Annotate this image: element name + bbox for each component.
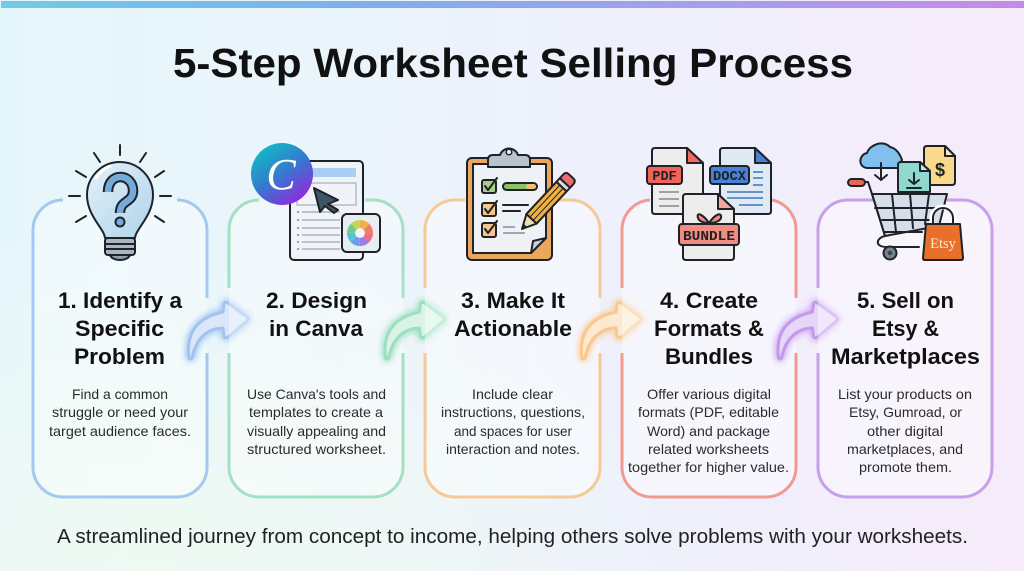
icon: shopping cart with downloads and Etsy bag (848, 143, 963, 260)
heading: step 4: Bundles (665, 344, 753, 369)
description: step 2: visually appealing and (247, 423, 386, 439)
description: step 5: promote them. (859, 459, 952, 475)
description: step 5: other digital (867, 423, 943, 439)
description: step 5: Etsy, Gumroad, or (849, 404, 962, 420)
heading: step 5: Etsy & (872, 316, 939, 341)
arrow: step 3 to 4 (581, 302, 641, 359)
description: step 5 (838, 386, 972, 475)
heading: step 1: Specific (75, 316, 164, 341)
icon: PDF, DOCX and bundle files: BUNDLE (683, 230, 735, 245)
description: step 4: Offer various digital (647, 386, 771, 402)
icon: Canva worksheet design (251, 143, 380, 260)
panel: step 3 (425, 149, 600, 497)
heading: step 3: 3. Make It (461, 288, 566, 313)
heading: step 5: 5. Sell on (857, 288, 954, 313)
top gradient bar (1, 1, 1024, 8)
heading: step 2: 2. Design (266, 288, 367, 313)
heading: step 2 (266, 288, 367, 341)
heading: step 1: 1. Identify a (58, 288, 182, 313)
heading: step 5 (831, 288, 980, 369)
description: step 5: marketplaces, and (847, 441, 963, 457)
description: step 1: Find a common (72, 386, 168, 402)
icon: PDF, DOCX and bundle files: DOCX (713, 170, 747, 185)
icon: PDF, DOCX and bundle files: PDF (652, 170, 677, 185)
description: step 1: struggle or need your (52, 404, 188, 420)
description: step 3 (441, 386, 585, 457)
panel: step 1 (33, 145, 207, 497)
description: step 2: structured worksheet. (247, 441, 386, 457)
description: step 4: formats (PDF, editable (638, 404, 779, 420)
panel: step 5 (818, 143, 992, 497)
description: step 4: Word) and package (647, 423, 770, 439)
description: step 3: instructions, questions, (441, 404, 585, 420)
panel: step 2 (229, 143, 403, 497)
title: 5-Step Worksheet Selling Process (173, 40, 853, 86)
heading: step 2: in Canva (269, 316, 363, 341)
arrow: step 2 to 3 (385, 302, 444, 359)
icon: light bulb with question mark (69, 145, 171, 260)
arrow: step 1 to 2 (188, 302, 248, 359)
heading: step 1 (58, 288, 182, 369)
description: step 2: Use Canva's tools and (247, 386, 386, 402)
heading: step 4 (654, 288, 764, 369)
description: step 4: together for higher value. (628, 459, 789, 475)
description: step 1 (49, 386, 191, 439)
icon: shopping cart with downloads and Etsy bag: $ (935, 160, 945, 180)
description: step 4: related worksheets (648, 441, 769, 457)
icon: shopping cart with downloads and Etsy bag: Etsy (930, 236, 957, 252)
icon: Canva worksheet design: C (266, 150, 296, 199)
icon: PDF, DOCX and bundle files (647, 148, 771, 260)
heading: step 4: Formats & (654, 316, 764, 341)
description: step 3: interaction and notes. (446, 441, 580, 457)
heading: step 3 (454, 288, 572, 341)
icon: clipboard checklist and pencil (467, 149, 576, 260)
description: step 3: Include clear (472, 386, 553, 402)
heading: step 4: 4. Create (660, 288, 758, 313)
arrow: step 4 to 5 (778, 302, 838, 359)
description: step 5: List your products on (838, 386, 972, 402)
description: step 1: target audience faces. (49, 423, 191, 439)
panel: step 4 (622, 148, 796, 497)
description: step 2 (247, 386, 386, 457)
heading: step 3: Actionable (454, 316, 572, 341)
description: step 3: and spaces for user (454, 423, 572, 439)
heading: step 5: Marketplaces (831, 344, 980, 369)
footer tagline: A streamlined journey from concept to income, helping others solve problems with your worksheets. (57, 526, 968, 548)
heading: step 1: Problem (74, 344, 165, 369)
description: step 2: templates to create a (249, 404, 383, 420)
description: step 4 (628, 386, 789, 475)
